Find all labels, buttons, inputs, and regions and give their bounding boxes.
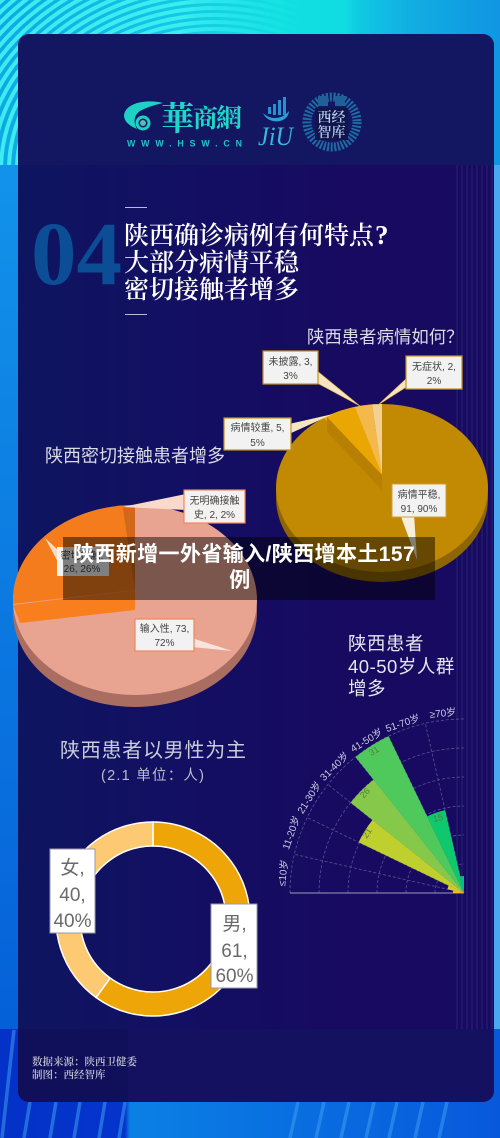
heading: age: 40-50岁人群 — [348, 656, 455, 677]
callout: undisclosed: 3% — [283, 371, 298, 382]
pie chart: transmission — [0, 490, 257, 707]
label: male: 61, — [221, 941, 248, 962]
callout: imported: 72% — [154, 638, 175, 649]
callout: imported: 输入性, 73, — [140, 622, 189, 635]
title — [124, 208, 388, 314]
label: female: 40% — [53, 911, 92, 932]
logo name: 商 — [193, 105, 218, 133]
axis labels: 11-20岁 — [279, 814, 303, 851]
logo name: 網 — [216, 104, 242, 133]
heading: age: 陕西患者 — [348, 633, 424, 654]
callout: undisclosed: 未披露, 3, — [269, 355, 312, 368]
callout: asymptomatic: 无症状, 2, — [412, 360, 456, 373]
axis labels: 41-50岁 — [348, 725, 385, 755]
title: 密切接触者增多 — [124, 276, 299, 304]
callout: imported — [135, 619, 232, 651]
overlay caption — [63, 537, 435, 600]
logo url: WWW.HSW.CN — [127, 138, 242, 148]
icon: think tank emblem: 西经 — [318, 110, 346, 126]
callout: undisclosed — [263, 351, 360, 406]
title: ? — [375, 220, 388, 250]
value labels: 31 — [367, 744, 381, 758]
callout: unknown contact: 史, 2, 2% — [194, 509, 235, 521]
heading: gender: 陕西患者以男性为主 — [60, 739, 246, 762]
callout: unknown contact: 无明确接触 — [190, 494, 240, 507]
callout: stable: 91, 90% — [401, 504, 437, 515]
callout: asymptomatic: 2% — [427, 376, 441, 387]
axis labels: ≥70岁 — [429, 705, 457, 721]
axis labels: 21-30岁 — [294, 779, 324, 816]
label: male: 男, — [222, 914, 247, 935]
callout: unknown contact — [122, 490, 245, 523]
callout: close contact: 26, 26% — [64, 564, 100, 575]
background: middle blue band — [0, 165, 500, 1030]
icon: JiU — [258, 97, 295, 151]
icon: JiU: JiU — [258, 122, 295, 151]
donut chart: gender — [50, 822, 257, 1016]
pie chart: condition — [224, 351, 488, 582]
overlay caption: 例 — [229, 569, 251, 592]
callout: severe — [224, 414, 333, 450]
logo: HSW and JiU and think tank — [124, 96, 357, 151]
callout: severe: 病情较重, 5, — [231, 421, 284, 434]
axis labels: 31-40岁 — [317, 749, 351, 783]
value labels: 15 — [432, 812, 444, 824]
heading: close contact: 陕西密切接触患者增多 — [45, 446, 225, 466]
source note: 数据来源：陕西卫健委 — [32, 1055, 137, 1068]
heading: age: 增多 — [348, 678, 386, 699]
background: right light strip — [494, 165, 500, 1030]
title: 大部分病情平稳 — [124, 249, 301, 277]
logo name — [161, 101, 242, 138]
background: bottom blue band — [0, 1029, 500, 1138]
subheading: unit: (2.1 单位：人) — [101, 767, 204, 784]
big number 04: 04 — [31, 205, 122, 304]
value labels: 21 — [360, 826, 374, 840]
rose chart: age groups — [275, 705, 464, 893]
label: female: 女, — [60, 857, 85, 879]
label: male: 60% — [215, 966, 254, 987]
callout: stable: 病情平稳, — [398, 488, 440, 501]
overlay caption: 陕西新增一外省输入/陕西增本土157 — [73, 543, 415, 566]
title: 陕西确诊病例有何特点 — [124, 222, 375, 250]
axis labels: 51-70岁 — [384, 711, 422, 735]
value labels — [358, 744, 444, 840]
label: female — [50, 849, 95, 933]
callout: stable — [392, 484, 446, 560]
label: male — [211, 904, 257, 988]
icon: wifi eye logo — [124, 101, 163, 130]
heading: age — [348, 633, 455, 699]
callout: severe: 5% — [250, 438, 265, 449]
icon: think tank emblem — [307, 96, 357, 147]
value labels: 26 — [358, 786, 372, 800]
icon: think tank emblem: 智库 — [318, 125, 346, 141]
callout: asymptomatic — [378, 356, 462, 405]
label: female: 40, — [59, 885, 86, 906]
source note: 制图：西经智库 — [32, 1068, 106, 1081]
heading: condition: 陕西患者病情如何？ — [307, 327, 464, 347]
source note — [32, 1055, 137, 1081]
axis labels — [275, 705, 457, 887]
background: top cyan wave band — [0, 0, 500, 165]
axis labels: ≤10岁 — [275, 859, 291, 887]
callout: close contact: 密切接触, — [61, 549, 103, 562]
logo name: 華 — [161, 101, 194, 138]
callout: close contact — [45, 538, 109, 576]
